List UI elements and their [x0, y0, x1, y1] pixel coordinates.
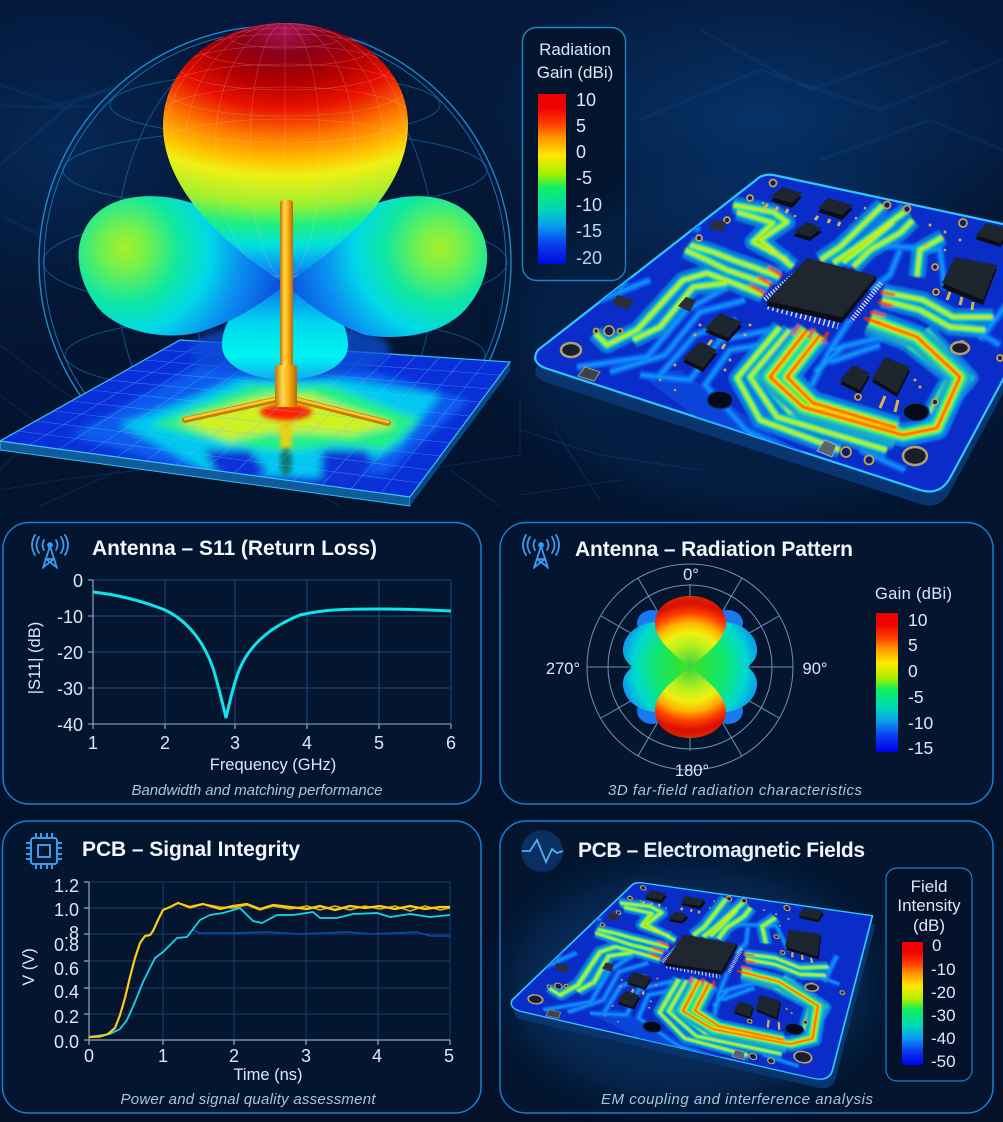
- signal line chart: 0.8: [54, 935, 79, 955]
- icon: wave: [521, 830, 563, 872]
- S11 line chart: |S11| (dB): [26, 622, 44, 694]
- polar radiation plot: 270°: [546, 660, 580, 678]
- signal line chart: 1: [158, 1046, 168, 1066]
- caption: EM coupling and interference analysis: [601, 1091, 874, 1108]
- legend: radiation gain: Gain (dBi): [537, 63, 613, 82]
- signal line chart: V (V): [20, 948, 38, 986]
- lobe: bottom: [222, 283, 348, 380]
- polar radiation plot: 90°: [803, 660, 827, 678]
- heading: PCB – Electromagnetic Fields: [578, 839, 865, 862]
- legend: gain: [875, 585, 952, 758]
- signal line chart: 4: [372, 1046, 382, 1066]
- heading: Antenna – Radiation Pattern: [575, 538, 853, 561]
- lobe: left side: [79, 196, 284, 336]
- legend: radiation gain: -10: [576, 195, 602, 215]
- lobe: right side: [286, 196, 487, 337]
- S11 line chart: 6: [446, 733, 456, 753]
- legend: gain: -15: [908, 738, 933, 758]
- signal line chart: [20, 876, 454, 1084]
- icon: chip: [26, 833, 62, 869]
- caption: 3D far-field radiation characteristics: [608, 782, 862, 799]
- signal line chart: 0.2: [54, 1007, 79, 1027]
- legend: radiation gain: Radiation: [539, 40, 611, 59]
- hero: antenna radiation pattern: [0, 23, 511, 506]
- signal line chart: 0.6: [54, 959, 79, 979]
- polar radiation plot: 180°: [675, 762, 709, 780]
- legend: radiation gain: -5: [576, 168, 592, 188]
- caption: Bandwidth and matching performance: [132, 782, 382, 799]
- heading: PCB – Signal Integrity: [82, 838, 300, 861]
- caption: Power and signal quality assessment: [120, 1091, 376, 1108]
- signal line chart: 3: [301, 1046, 311, 1066]
- legend: field intensity: Intensity: [897, 896, 961, 915]
- signal line chart: 1.2: [54, 876, 79, 896]
- polar radiation plot: 0°: [683, 566, 699, 584]
- legend: gain: -5: [908, 687, 924, 707]
- legend: radiation gain: 10: [576, 90, 596, 110]
- legend: field intensity: 0: [932, 936, 941, 955]
- hero: PCB field heat map: [510, 170, 1003, 510]
- PCB inset heat map: [472, 870, 929, 1100]
- legend: radiation gain: 0: [576, 142, 586, 162]
- wireframe sphere: [38, 26, 512, 396]
- legend: gain: Gain (dBi): [875, 585, 952, 603]
- polar radiation plot: [546, 564, 827, 780]
- signal line chart: 1.0: [54, 900, 79, 920]
- legend: field intensity: [886, 868, 972, 1081]
- S11 line chart: 3: [230, 733, 240, 753]
- legend: field intensity: -40: [931, 1029, 956, 1048]
- lobe shadow glow: [190, 322, 390, 378]
- signal line chart: .8: [64, 923, 79, 943]
- signal line chart: 0.0: [54, 1032, 79, 1052]
- panel: signal integrity: [2, 821, 481, 1113]
- legend: radiation gain: -15: [576, 221, 602, 241]
- legend: field intensity: (dB): [913, 916, 945, 935]
- legend: field intensity: -20: [931, 983, 956, 1002]
- icon: antenna: [32, 535, 68, 568]
- antenna: [185, 200, 388, 423]
- legend: gain: -10: [908, 713, 934, 733]
- S11 line chart: -20: [57, 643, 83, 663]
- signal line chart: 0.4: [54, 982, 79, 1002]
- signal line chart: Time (ns): [233, 1066, 303, 1084]
- legend: field intensity: -10: [931, 960, 956, 979]
- signal line chart: 5: [444, 1046, 454, 1066]
- S11 line chart: -30: [57, 679, 83, 699]
- panel: electromagnetic fields: [472, 821, 993, 1113]
- legend: gain: 0: [908, 661, 918, 681]
- S11 line chart: -10: [57, 607, 83, 627]
- legend: radiation gain: -20: [576, 248, 602, 268]
- S11 line chart: -40: [57, 715, 83, 735]
- lobe: main top: [160, 23, 410, 284]
- legend: radiation gain: [522, 28, 626, 280]
- S11 line chart: Frequency (GHz): [210, 756, 336, 774]
- legend: field intensity: -30: [931, 1006, 956, 1025]
- S11 line chart: 0: [73, 571, 83, 591]
- legend: gain: 10: [908, 610, 928, 630]
- S11 line chart: [26, 571, 456, 774]
- ground plane with near-field heat map: [0, 340, 510, 506]
- background glow and network lines: [0, 0, 1003, 506]
- signal line chart: 0: [84, 1046, 94, 1066]
- panel: S11 return loss: [3, 522, 481, 804]
- panel: radiation pattern: [500, 522, 993, 804]
- legend: field intensity: Field: [911, 877, 947, 896]
- legend: radiation gain: 5: [576, 116, 586, 136]
- heading: Antenna – S11 (Return Loss): [92, 537, 377, 560]
- legend: field intensity: -50: [931, 1052, 956, 1071]
- legend: gain: 5: [908, 635, 918, 655]
- S11 line chart: 5: [374, 733, 384, 753]
- icon: antenna: [523, 535, 559, 568]
- signal line chart: 2: [229, 1046, 239, 1066]
- S11 line chart: 1: [88, 733, 98, 753]
- S11 line chart: 2: [160, 733, 170, 753]
- S11 line chart: 4: [302, 733, 312, 753]
